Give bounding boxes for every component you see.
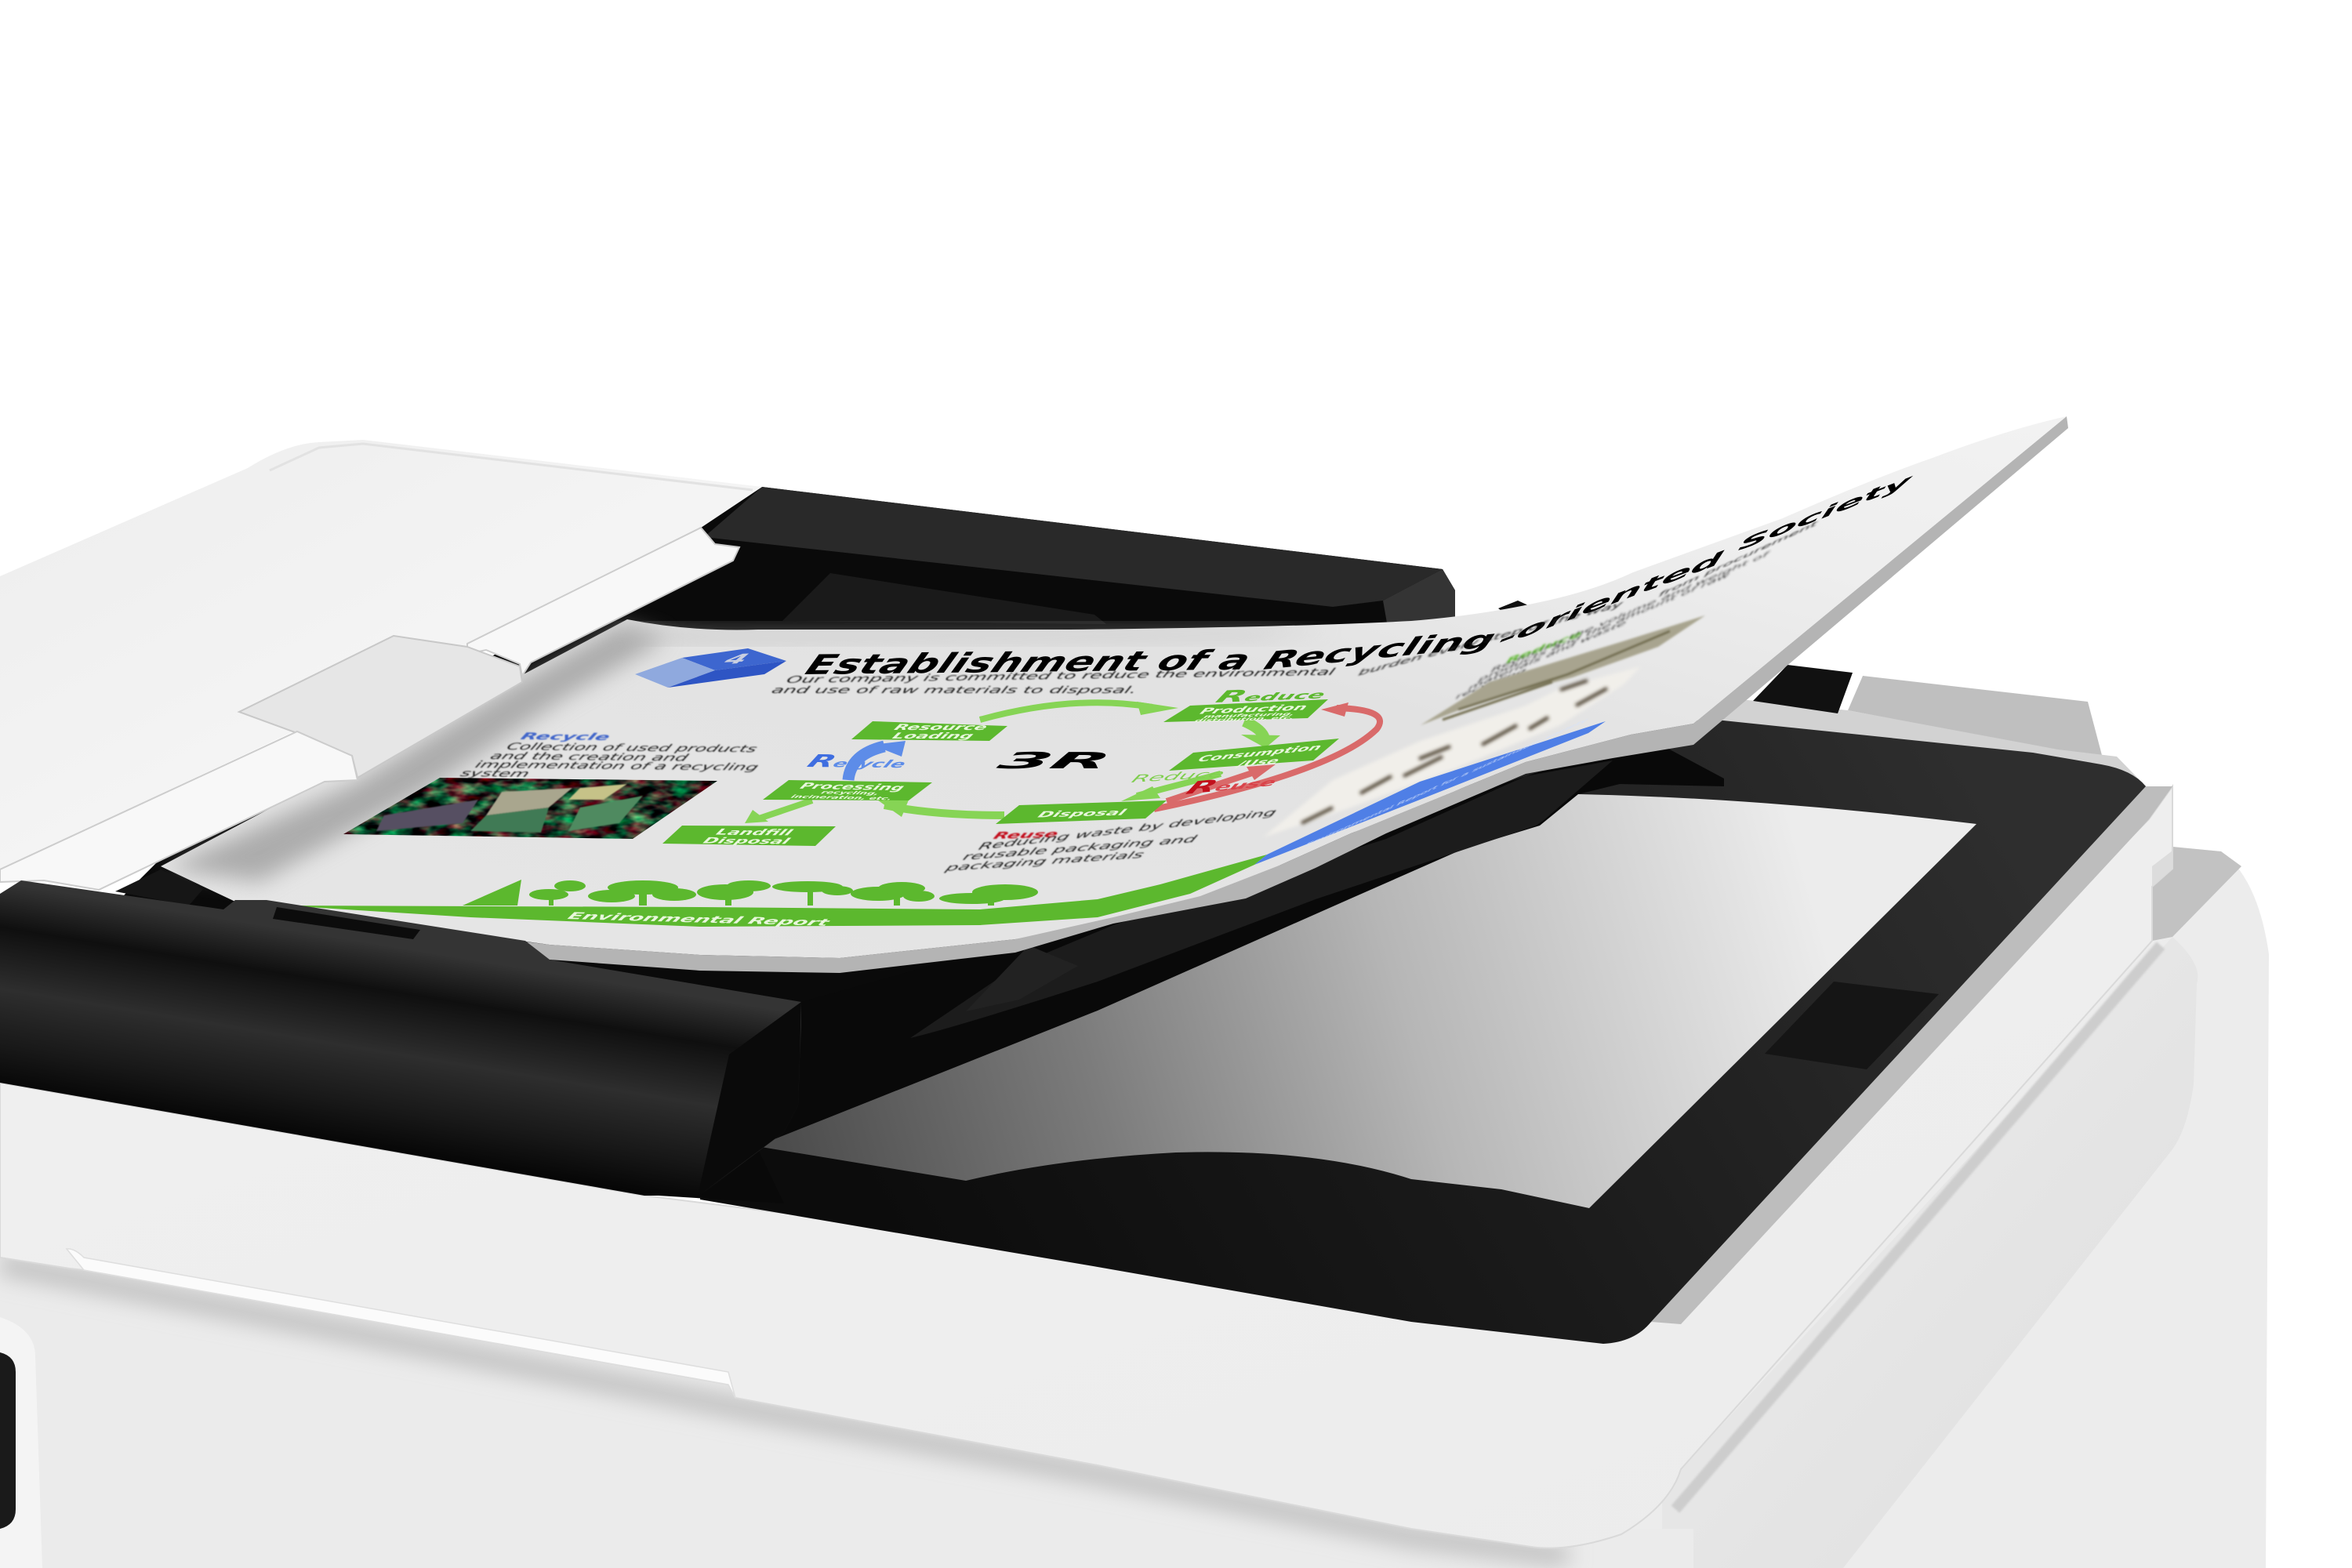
report title: Establishment of a (800, 644, 1256, 681)
reduce top label: Reduce (1212, 683, 1330, 706)
tray lower rail (0, 731, 358, 890)
reduce description, far side: recycling (1454, 666, 1527, 701)
processing box: recycling, (819, 789, 880, 796)
left control rim (0, 1317, 42, 1568)
lid slot (67, 1249, 735, 1398)
lid latch notch (1765, 982, 1939, 1069)
processing box (763, 780, 932, 801)
red reuse arrow (1154, 708, 1380, 809)
production box (1163, 699, 1328, 724)
bar right end (698, 1002, 801, 1196)
rear black tab (1753, 665, 1853, 713)
arm flap (966, 946, 1078, 1011)
recycle description (458, 731, 760, 779)
shadow under lid (0, 1264, 1568, 1556)
rear knob (1498, 601, 1528, 619)
report intro text: from procurement (1657, 519, 1819, 599)
paper stack edge (235, 416, 2068, 973)
tray top lip (270, 444, 753, 490)
report intro text (770, 519, 1819, 695)
reduce description, far side: products and the amount of raw (1476, 570, 1731, 684)
reuse description: reusable packaging and (960, 833, 1200, 862)
bar slot (273, 907, 420, 939)
rear bezel strip (1709, 698, 2146, 786)
reduce side label: Reduce (1129, 767, 1228, 785)
production box: distribution, etc. (1193, 715, 1296, 724)
resource loading box (851, 721, 1007, 741)
processing box: incineration, etc. (789, 793, 894, 801)
tray thumb recess (239, 636, 522, 778)
hopper (110, 487, 1455, 1098)
reuse label: Reuse (1182, 770, 1283, 799)
environmental report green band (284, 855, 1267, 928)
3R label: 3R (993, 747, 1116, 774)
white document paper (161, 416, 2068, 973)
landfill box: Landfill (714, 827, 795, 837)
reduce description, far side: Reducing the volume and weight of (1490, 550, 1771, 674)
hopper top surface (704, 487, 1443, 607)
document feed tray (0, 440, 762, 890)
scanned sheet on glass (757, 794, 1976, 1208)
disposal box (996, 800, 1167, 824)
recycle description: system (458, 768, 532, 779)
hopper chamfer (1383, 569, 1455, 627)
front black ADF bar (0, 880, 801, 1196)
ADF arm top (910, 760, 1613, 1038)
band label: Environmental Report (565, 910, 833, 928)
scanner lid white surface (0, 786, 2172, 1548)
landfill box (662, 826, 836, 846)
report title: -oriented (1496, 546, 1726, 652)
consumption box: /Use (1233, 756, 1282, 770)
report title (800, 470, 1915, 681)
band trees (463, 880, 1038, 906)
blue recycle arrow (848, 746, 884, 780)
report intro text: and use of raw materials to disposal. (770, 684, 1139, 695)
reuse description: Reducing waste by developing (977, 807, 1279, 852)
recycling photo (343, 778, 717, 839)
3R diagram (662, 683, 1380, 846)
green flow arrows (757, 702, 1265, 819)
report intro text: Our company is committed to reduce the environmental (785, 666, 1338, 685)
recycle description: Recycle (519, 731, 612, 742)
resource loading box: Loading (890, 731, 975, 741)
resource loading box: Resource (892, 723, 989, 732)
consumption box: Consumption (1196, 742, 1323, 764)
cube number: 4 (719, 652, 753, 667)
arrow heads (745, 702, 1280, 823)
blue band text: Environmental Report for a sustainable society (1305, 717, 1589, 848)
paper stack photo (1421, 615, 1705, 725)
blue band (1254, 717, 1606, 865)
processing box: Processing (798, 782, 906, 793)
recycle description: implementation of a recycling (473, 759, 760, 773)
disposal box: Disposal (1036, 808, 1128, 819)
paper tray shadow (165, 623, 666, 882)
hopper inner face (782, 573, 1106, 624)
printer body side (1568, 847, 2269, 1568)
production box: manufacturing, (1202, 711, 1297, 719)
lid shadow band (1675, 946, 2161, 1509)
glass frame (700, 720, 2146, 1344)
recycle label: Recycle (804, 751, 912, 772)
recycle description: and the creation and (488, 750, 691, 764)
cube icon (635, 648, 786, 688)
recycle description: Collection of used products (504, 741, 759, 754)
paper top shadow (622, 623, 1333, 644)
report title: Recycling (1260, 624, 1500, 676)
rear scanner cover (1848, 676, 2103, 758)
lid grey bevel (1651, 786, 2172, 1324)
ADF arm base (659, 737, 1724, 1203)
crumpled paper photo (1263, 666, 1641, 837)
body top surface (2148, 847, 2241, 941)
consumption box (1169, 739, 1339, 771)
reuse description (942, 807, 1279, 873)
tray right rail (467, 528, 739, 676)
reuse description: Reuse (991, 828, 1061, 841)
left control display edge (0, 1352, 16, 1529)
body inner panel (1662, 937, 2198, 1568)
printer lower front panel (0, 1247, 1693, 1568)
production box: Production (1198, 702, 1309, 717)
reduce description, far side: materials and waste (1467, 619, 1628, 692)
reuse description: packaging materials (942, 849, 1146, 873)
report intro text: burden every step of the way (1357, 600, 1624, 678)
lid right end notch (2152, 851, 2172, 887)
tray corner clip (115, 869, 203, 906)
reduce description, far side: Reduce (1504, 629, 1583, 666)
landfill box: Disposal (701, 836, 793, 846)
paper top face (161, 416, 2067, 958)
report title: Society (1736, 470, 1915, 555)
